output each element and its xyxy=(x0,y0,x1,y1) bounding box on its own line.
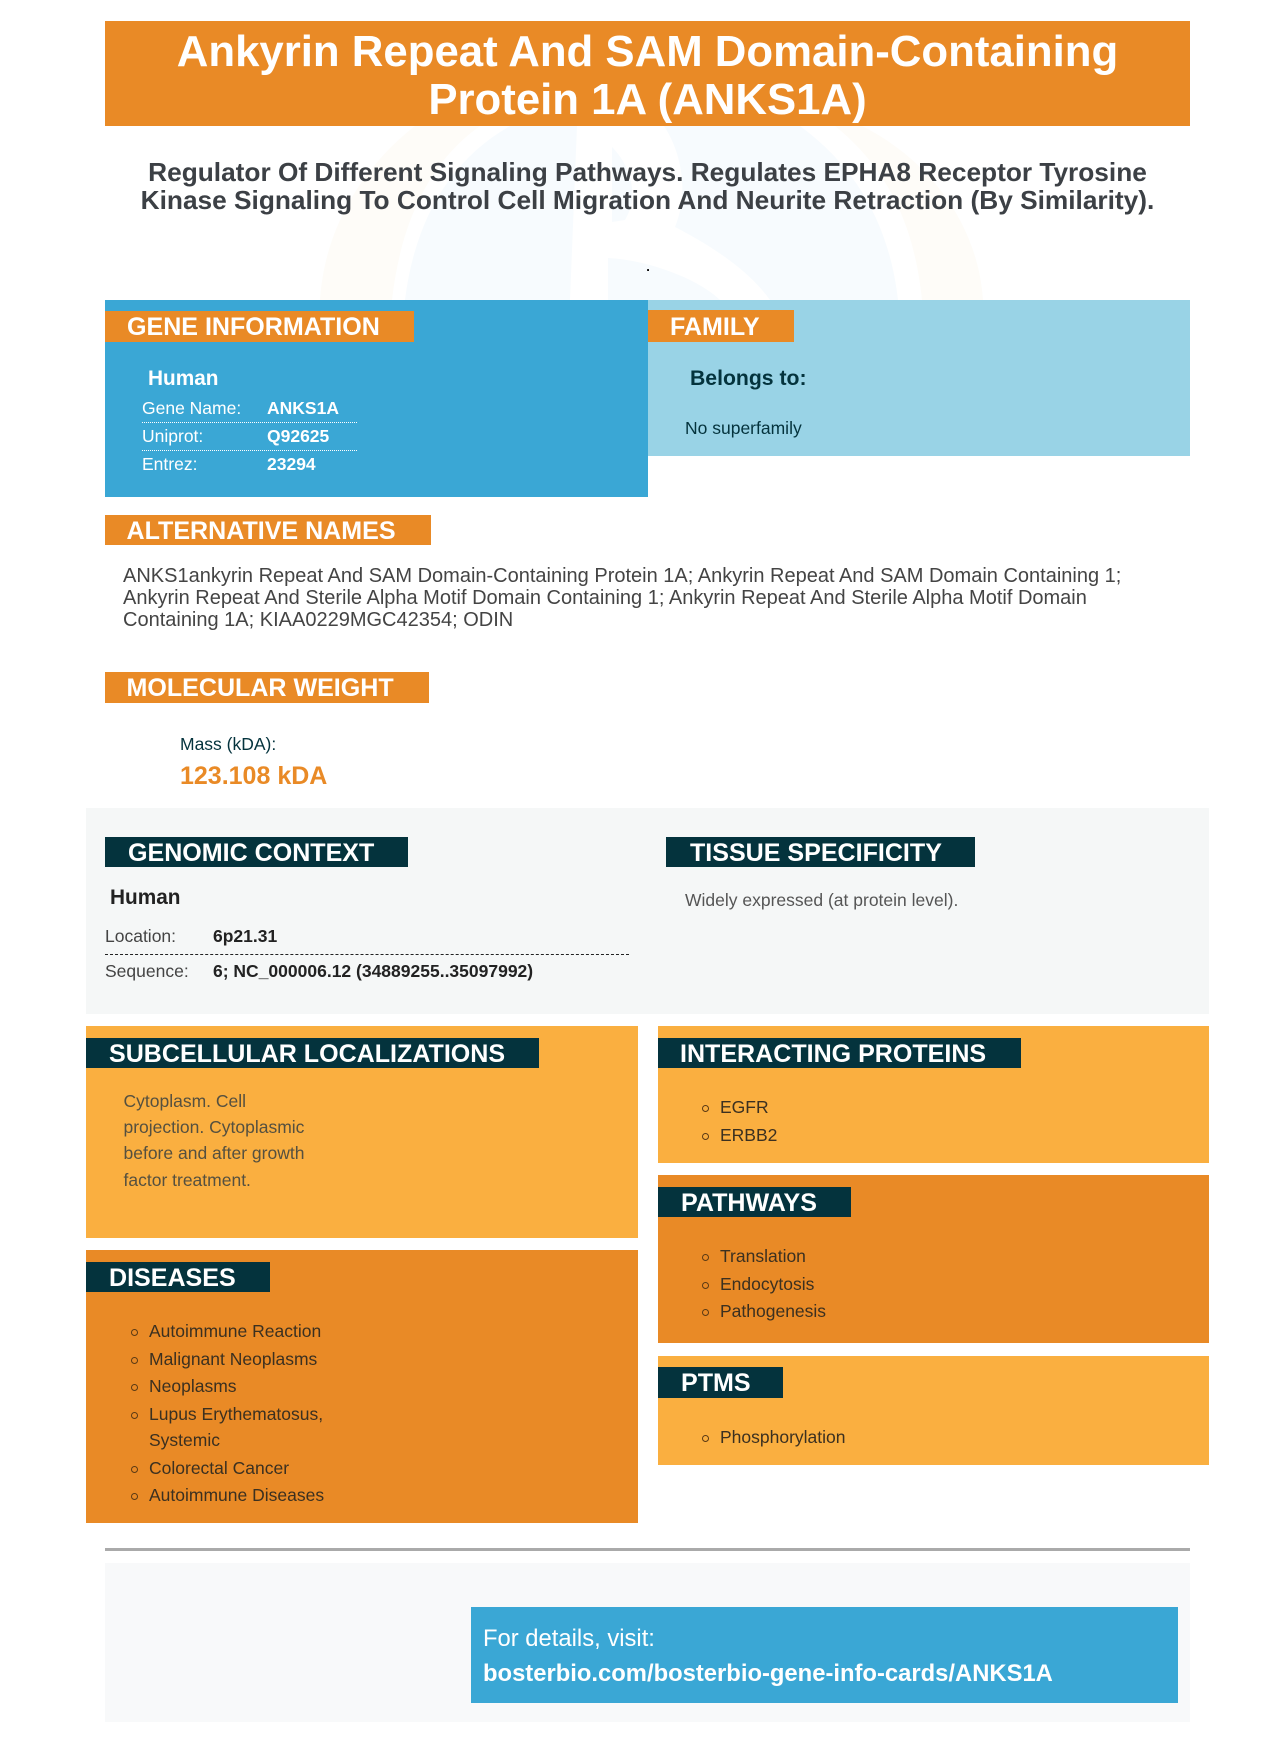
localization text: factor treatment. xyxy=(124,1170,251,1190)
species label: Human xyxy=(148,367,218,390)
disease list: Neoplasms xyxy=(149,1376,237,1396)
sequence row: Sequence: xyxy=(105,961,189,981)
alternative names text xyxy=(123,565,1121,631)
location row: Location: xyxy=(105,926,176,946)
disease list: Lupus Erythematosus, xyxy=(149,1404,323,1424)
heading: family: FAMILY xyxy=(670,313,760,341)
tissue specificity text: Widely expressed (at protein level). xyxy=(685,890,958,910)
panel: interacting proteins xyxy=(658,1026,1209,1163)
belongs to label: Belongs to: xyxy=(690,367,807,390)
disease list: Autoimmune Diseases xyxy=(149,1485,324,1505)
call to action link: bosterbio.com/bosterbio-gene-info-cards/ANKS1A xyxy=(483,1660,1053,1687)
heading: ptms: PTMS xyxy=(681,1369,751,1397)
heading: diseases xyxy=(86,1262,270,1292)
mass value: 123.108 kDA xyxy=(180,762,327,790)
entrez row: Entrez: xyxy=(142,454,197,474)
title: Ankyrin Repeat And SAM Domain-Containing xyxy=(177,27,1118,76)
heading: pathways xyxy=(658,1187,851,1217)
alternative names text: Ankyrin Repeat And Sterile Alpha Motif Domain Containing 1; Ankyrin Repeat And Sterile Alpha Motif Domain xyxy=(123,587,1087,609)
gene name row: ANKS1A xyxy=(267,398,339,418)
panel: genomic context and tissue specificity xyxy=(86,808,1209,1014)
location row xyxy=(105,923,629,955)
description: Regulator Of Different Signaling Pathways. Regulates EPHA8 Receptor Tyrosine xyxy=(148,157,1147,187)
title xyxy=(105,21,1190,126)
pathway list: Endocytosis xyxy=(720,1274,814,1294)
heading: gene information: GENE INFORMATION xyxy=(127,313,380,341)
pathway list xyxy=(702,1246,826,1321)
heading: tissue specificity: TISSUE SPECIFICITY xyxy=(690,839,942,867)
ptm list: Phosphorylation xyxy=(720,1427,846,1447)
disease list: Malignant Neoplasms xyxy=(149,1349,317,1369)
heading: molecular weight: MOLECULAR WEIGHT xyxy=(126,674,394,702)
heading: family xyxy=(648,310,794,342)
superfamily text: No superfamily xyxy=(685,418,802,438)
heading: diseases: DISEASES xyxy=(109,1264,236,1292)
gene name row: Gene Name: xyxy=(142,398,241,418)
sequence row: 6; NC_000006.12 (34889255..35097992) xyxy=(213,961,533,981)
disease list: Autoimmune Reaction xyxy=(149,1321,321,1341)
panel: ptms xyxy=(658,1356,1209,1465)
protein list: EGFR xyxy=(720,1097,769,1117)
entrez row xyxy=(142,454,316,474)
heading: ptms xyxy=(658,1367,783,1398)
description xyxy=(141,157,1154,215)
disease list: Systemic xyxy=(149,1430,220,1450)
uniprot row: Uniprot: xyxy=(142,426,203,446)
disease list xyxy=(131,1321,324,1505)
alternative names text: Containing 1A; KIAA0229MGC42354; ODIN xyxy=(123,609,513,631)
heading: genomic context: GENOMIC CONTEXT xyxy=(128,839,374,867)
localization text xyxy=(124,1090,304,1190)
title: Protein 1A (ANKS1A) xyxy=(428,74,867,124)
pathway list: Pathogenesis xyxy=(720,1301,826,1321)
call to action xyxy=(471,1607,1178,1703)
localization text: before and after growth xyxy=(124,1143,304,1163)
heading: alternative names: ALTERNATIVE NAMES xyxy=(126,517,396,545)
localization text: Cytoplasm. Cell xyxy=(124,1090,246,1110)
center dot: . xyxy=(646,259,650,274)
uniprot row xyxy=(142,423,357,450)
disease list: Colorectal Cancer xyxy=(149,1458,289,1478)
panel: alternative names xyxy=(105,515,1121,631)
panel: diseases xyxy=(86,1250,638,1523)
heading: subcellular localizations: SUBCELLULAR LOCALIZATIONS xyxy=(109,1040,505,1068)
panel: molecular weight xyxy=(105,672,429,790)
mass label: Mass (kDA): xyxy=(180,734,276,754)
panel: pathways xyxy=(658,1175,1209,1343)
panel: family xyxy=(648,300,1190,456)
description: Kinase Signaling To Control Cell Migration And Neurite Retraction (By Similarity). xyxy=(141,185,1154,215)
panel: footer xyxy=(105,1563,1190,1722)
heading: pathways: PATHWAYS xyxy=(681,1189,817,1217)
background watermark logo xyxy=(0,0,1288,320)
panel: subcellular localizations xyxy=(86,1026,638,1238)
protein list: ERBB2 xyxy=(720,1125,777,1145)
location row: 6p21.31 xyxy=(213,926,277,946)
call to action label: For details, visit: xyxy=(483,1625,655,1652)
species label: Human xyxy=(110,886,180,909)
heading: interacting proteins: INTERACTING PROTEINS xyxy=(680,1040,986,1068)
panel: gene information xyxy=(105,300,648,497)
gene name row xyxy=(142,395,357,422)
entrez row: 23294 xyxy=(267,454,316,474)
protein list xyxy=(702,1097,777,1145)
uniprot row: Q92625 xyxy=(267,426,329,446)
pathway list: Translation xyxy=(720,1246,806,1266)
alternative names text: ANKS1ankyrin Repeat And SAM Domain-Containing Protein 1A; Ankyrin Repeat And SAM Domain Containing 1; xyxy=(123,565,1121,587)
localization text: projection. Cytoplasmic xyxy=(124,1117,304,1137)
